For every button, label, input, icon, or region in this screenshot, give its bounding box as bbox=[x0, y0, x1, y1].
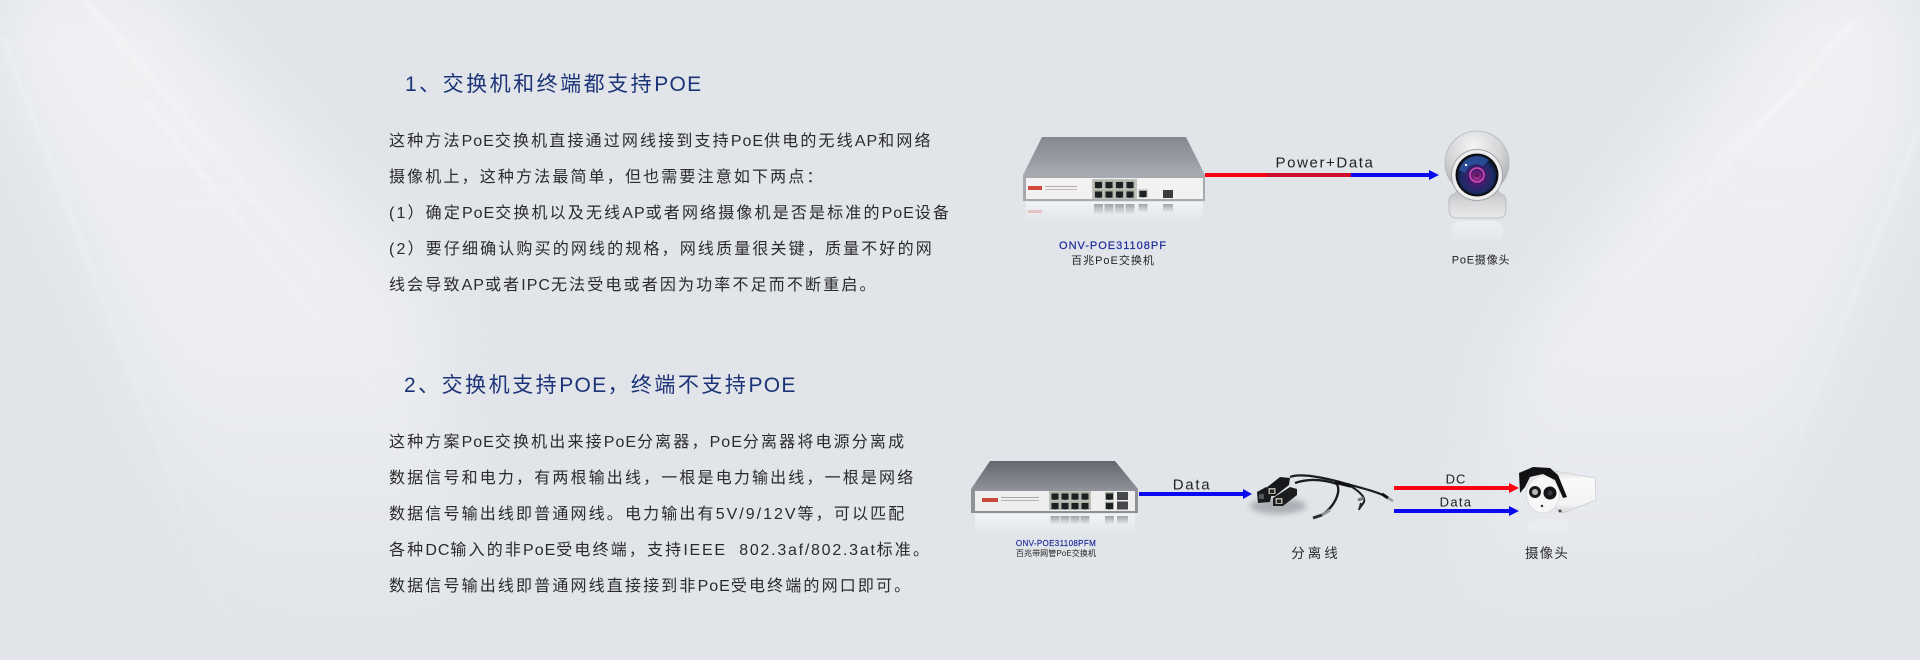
switch reflection bbox=[1026, 202, 1203, 222]
icon: bullet camera bbox=[1519, 467, 1596, 533]
icon: PoE splitter cables bbox=[1250, 475, 1393, 518]
label: DC: DC bbox=[1446, 472, 1466, 486]
label: splitter: 分离线 bbox=[1291, 545, 1341, 561]
arrow: Power+Data bbox=[1205, 170, 1439, 180]
text block: section 2 description: 数据信号和电力，有两根输出线，一根是电力输出线，一根是网络 bbox=[389, 470, 915, 487]
text block: section 2 description: 数据信号输出线即普通网线直接接到非PoE受电终端的网口即可。 bbox=[389, 578, 912, 595]
arrow: Data to camera bbox=[1394, 506, 1519, 516]
webcam reflection bbox=[1451, 221, 1503, 245]
text block: section 2 description bbox=[389, 433, 931, 595]
heading: section 2: 2、交换机支持POE，终端不支持POE bbox=[404, 374, 797, 397]
text block: section 2 description: 这种方案PoE交换机出来接PoE分离器，PoE分离器将电源分离成 bbox=[389, 434, 906, 451]
text block: section 1 description bbox=[389, 132, 951, 294]
icon: PoE webcam bbox=[1445, 131, 1509, 245]
switch reflection bbox=[975, 514, 1135, 534]
text block: section 1 description: (1）确定PoE交换机以及无线AP或者网络摄像机是否是标准的PoE设备 bbox=[389, 205, 951, 222]
switch: ONV-POE31108PFM bbox=[971, 461, 1138, 534]
label: switch 1 model: ONV-POE31108PF bbox=[1059, 240, 1167, 252]
text block: section 2 description: 数据信号输出线即普通网线。电力输出有5V/9/12V等，可以匹配 bbox=[389, 506, 906, 523]
label: camera: 摄像头 bbox=[1525, 546, 1569, 561]
label: Power+Data: Power+Data bbox=[1276, 154, 1374, 172]
heading: section 1: 1、交换机和终端都支持POE bbox=[405, 73, 702, 96]
arrow: DC bbox=[1394, 483, 1519, 493]
label: PoE camera: PoE摄像头 bbox=[1452, 252, 1510, 266]
label: switch 1 name: 百兆PoE交换机 bbox=[1071, 253, 1155, 267]
text block: section 1 description: 这种方法PoE交换机直接通过网线接到支持PoE供电的无线AP和网络 bbox=[389, 133, 933, 150]
label: switch 2 model: ONV-POE31108PFM bbox=[1016, 539, 1096, 548]
text block: section 1 description: 线会导致AP或者IPC无法受电或者因为功率不足而不断重启。 bbox=[389, 277, 878, 294]
label: Data 2: Data bbox=[1440, 494, 1472, 510]
switch: ONV-POE31108PF bbox=[1023, 137, 1205, 222]
text block: section 1 description: 摄像机上，这种方法最简单，但也需要注意如下两点： bbox=[389, 169, 825, 186]
arrow: Data to splitter bbox=[1139, 489, 1252, 499]
label: Data: Data bbox=[1173, 476, 1211, 494]
text block: section 2 description: 各种DC输入的非PoE受电终端，支持IEEE 802.3af/802.3at标准。 bbox=[389, 542, 931, 559]
label: switch 2 name: 百兆带网管PoE交换机 bbox=[1016, 548, 1096, 558]
text block: section 1 description: (2）要仔细确认购买的网线的规格，网线质量很关键，质量不好的网 bbox=[389, 241, 934, 258]
camera reflection bbox=[1526, 519, 1570, 533]
